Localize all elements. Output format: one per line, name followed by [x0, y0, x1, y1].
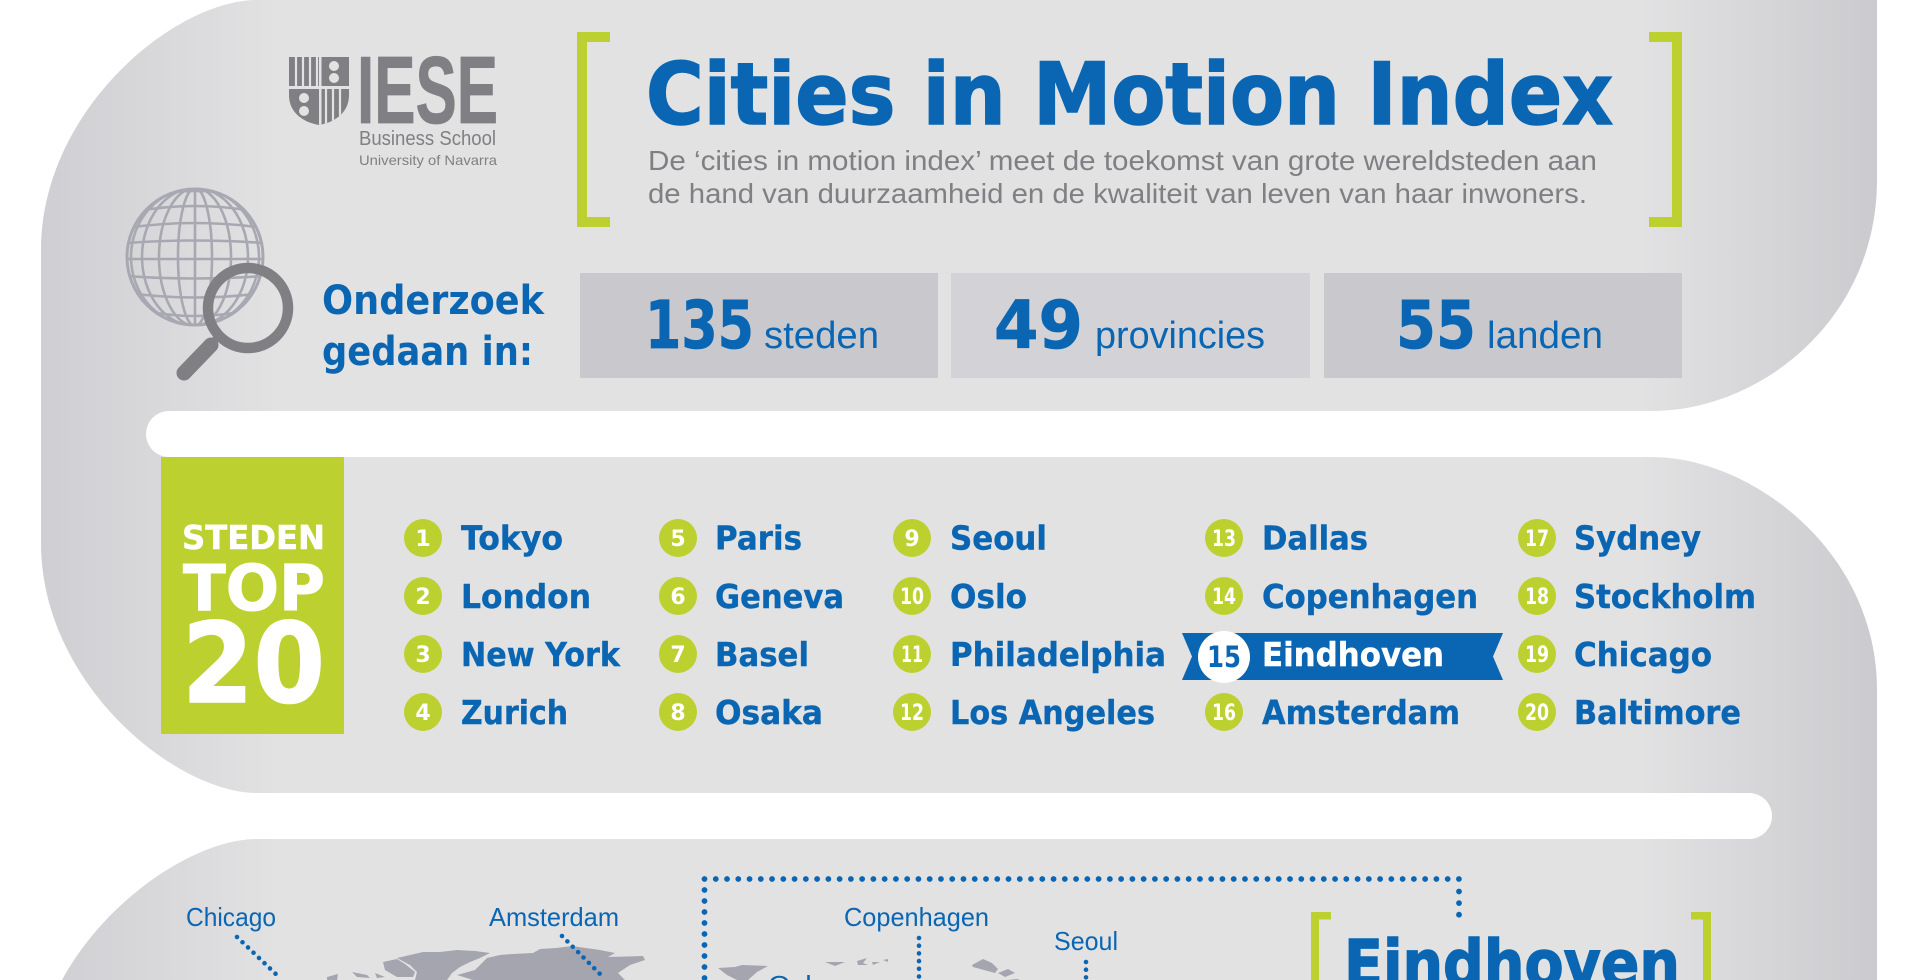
ranks 5 to 8: Paris — [715, 518, 802, 558]
badge: Steden top 20 — [161, 457, 344, 734]
stat: 135 steden: 135 — [645, 287, 754, 364]
logo: IESE Business School: Business School — [359, 128, 496, 150]
ranks 9 to 12: Oslo — [950, 577, 1027, 616]
ranks 17 to 20: Stockholm — [1574, 577, 1756, 616]
bracket right — [1649, 32, 1682, 227]
label: Chicago — [186, 902, 279, 977]
subtitle: de hand van duurzaamheid en de kwaliteit van leven van haar inwoners. — [648, 178, 1587, 209]
ranks 17 to 20: 19 — [1525, 643, 1549, 668]
heading: Onderzoek gedaan in: Onderzoek — [322, 278, 545, 324]
label: Seoul — [1054, 926, 1118, 978]
ribbon: Eindhoven: Eindhoven — [1262, 635, 1444, 674]
ranks 13 to 16 with highlighted Eindhoven: 13 — [1212, 527, 1236, 552]
icon: globe with magnifying glass — [126, 188, 288, 373]
heading: Onderzoek gedaan in: gedaan in: — [322, 329, 533, 375]
label: Amsterdam — [489, 902, 619, 978]
map labels with leaders — [186, 902, 1118, 980]
ranks 5 to 8: 6 — [670, 585, 686, 610]
ranks 13 to 16 with highlighted Eindhoven: 16 — [1212, 701, 1236, 726]
ranks 17 to 20: Chicago — [1574, 635, 1712, 674]
icon: IESE shield — [289, 57, 349, 125]
stat: 135 steden — [580, 273, 938, 378]
stat: 49 provincies: 49 — [994, 287, 1083, 364]
ribbon: Eindhoven: 15 — [1207, 640, 1241, 674]
stat: 55 landen — [1324, 273, 1682, 378]
logo: IESE Business School: University of Navarra — [359, 152, 497, 168]
ranks 1 to 4 — [404, 518, 621, 732]
city ranking list — [404, 518, 1756, 732]
ranks 17 to 20: Sydney — [1574, 518, 1701, 558]
ranks 9 to 12: 9 — [904, 527, 920, 552]
ranks 5 to 8 — [659, 518, 844, 732]
ranks 5 to 8: Osaka — [715, 693, 823, 732]
ribbon: Eindhoven — [1182, 631, 1503, 683]
ranks 5 to 8: 7 — [670, 643, 686, 668]
dotted frame to Eindhoven — [704, 879, 1459, 979]
ranks 5 to 8: Basel — [715, 635, 809, 674]
ranks 17 to 20: 17 — [1525, 527, 1549, 552]
stat: 135 steden: steden — [764, 315, 879, 357]
ranks 17 to 20: 20 — [1525, 701, 1549, 726]
ranks 13 to 16 with highlighted Eindhoven: Copenhagen — [1262, 577, 1478, 616]
ranks 17 to 20: 18 — [1525, 585, 1549, 610]
label: Seoul: Seoul — [1054, 926, 1118, 956]
ranks 1 to 4: Tokyo — [461, 518, 563, 558]
stat: 55 landen: 55 — [1396, 287, 1476, 364]
ranks 1 to 4: London — [461, 577, 591, 616]
ranks 9 to 12: 12 — [900, 701, 924, 726]
stat: 55 landen: landen — [1487, 315, 1603, 357]
logo: IESE Business School: IESE — [357, 37, 498, 144]
ranks 5 to 8: Geneva — [715, 577, 844, 616]
title block with brackets — [577, 32, 1682, 227]
ranks 5 to 8: 8 — [670, 701, 686, 726]
ranks 13 to 16 with highlighted Eindhoven: 14 — [1212, 585, 1236, 610]
badge: Steden top 20: TOP — [183, 552, 325, 625]
bracket left — [577, 32, 610, 227]
label: Copenhagen: Copenhagen — [844, 902, 989, 932]
stat: 49 provincies: provincies — [1095, 315, 1265, 357]
ranks 9 to 12 — [893, 518, 1166, 732]
stat: 49 provincies — [951, 273, 1310, 378]
subtitle — [648, 145, 1597, 209]
ranks 13 to 16 with highlighted Eindhoven: Amsterdam — [1262, 693, 1460, 732]
ranks 9 to 12: Los Angeles — [950, 693, 1155, 732]
title: Cities in Motion Index — [646, 45, 1613, 145]
ranks 9 to 12: Seoul — [950, 518, 1047, 558]
heading: Onderzoek gedaan in — [322, 278, 545, 375]
ranks 1 to 4: 2 — [415, 585, 431, 610]
label: Amsterdam: Amsterdam — [489, 902, 619, 932]
ranks 1 to 4: 1 — [415, 527, 431, 552]
label: Chicago: Chicago — [186, 902, 276, 932]
ranks 17 to 20 — [1518, 518, 1756, 732]
ranks 9 to 12: 11 — [901, 643, 923, 668]
ranks 17 to 20: Baltimore — [1574, 693, 1741, 732]
ranks 1 to 4: Zurich — [461, 693, 568, 732]
badge: Steden top 20: STEDEN — [182, 518, 325, 557]
ranks 1 to 4: 4 — [415, 701, 431, 726]
world map (top edge) — [327, 946, 1020, 980]
badge: Steden top 20: 20 — [182, 600, 325, 729]
ranks 13 to 16 with highlighted Eindhoven — [1182, 518, 1503, 732]
ranks 9 to 12: 10 — [900, 585, 924, 610]
ranks 1 to 4: 3 — [415, 643, 431, 668]
ranks 13 to 16 with highlighted Eindhoven: Dallas — [1262, 518, 1368, 558]
Eindhoven heading with brackets (cut by the bottom edge, as in the reference) — [1311, 912, 1711, 980]
ranks 5 to 8: 5 — [670, 527, 686, 552]
ranks 1 to 4: New York — [461, 635, 621, 674]
subtitle: De ‘cities in motion index’ meet de toekomst van grote wereldsteden aan — [648, 145, 1597, 176]
ranks 9 to 12: Philadelphia — [950, 635, 1166, 674]
logo: IESE Business School — [289, 56, 497, 168]
